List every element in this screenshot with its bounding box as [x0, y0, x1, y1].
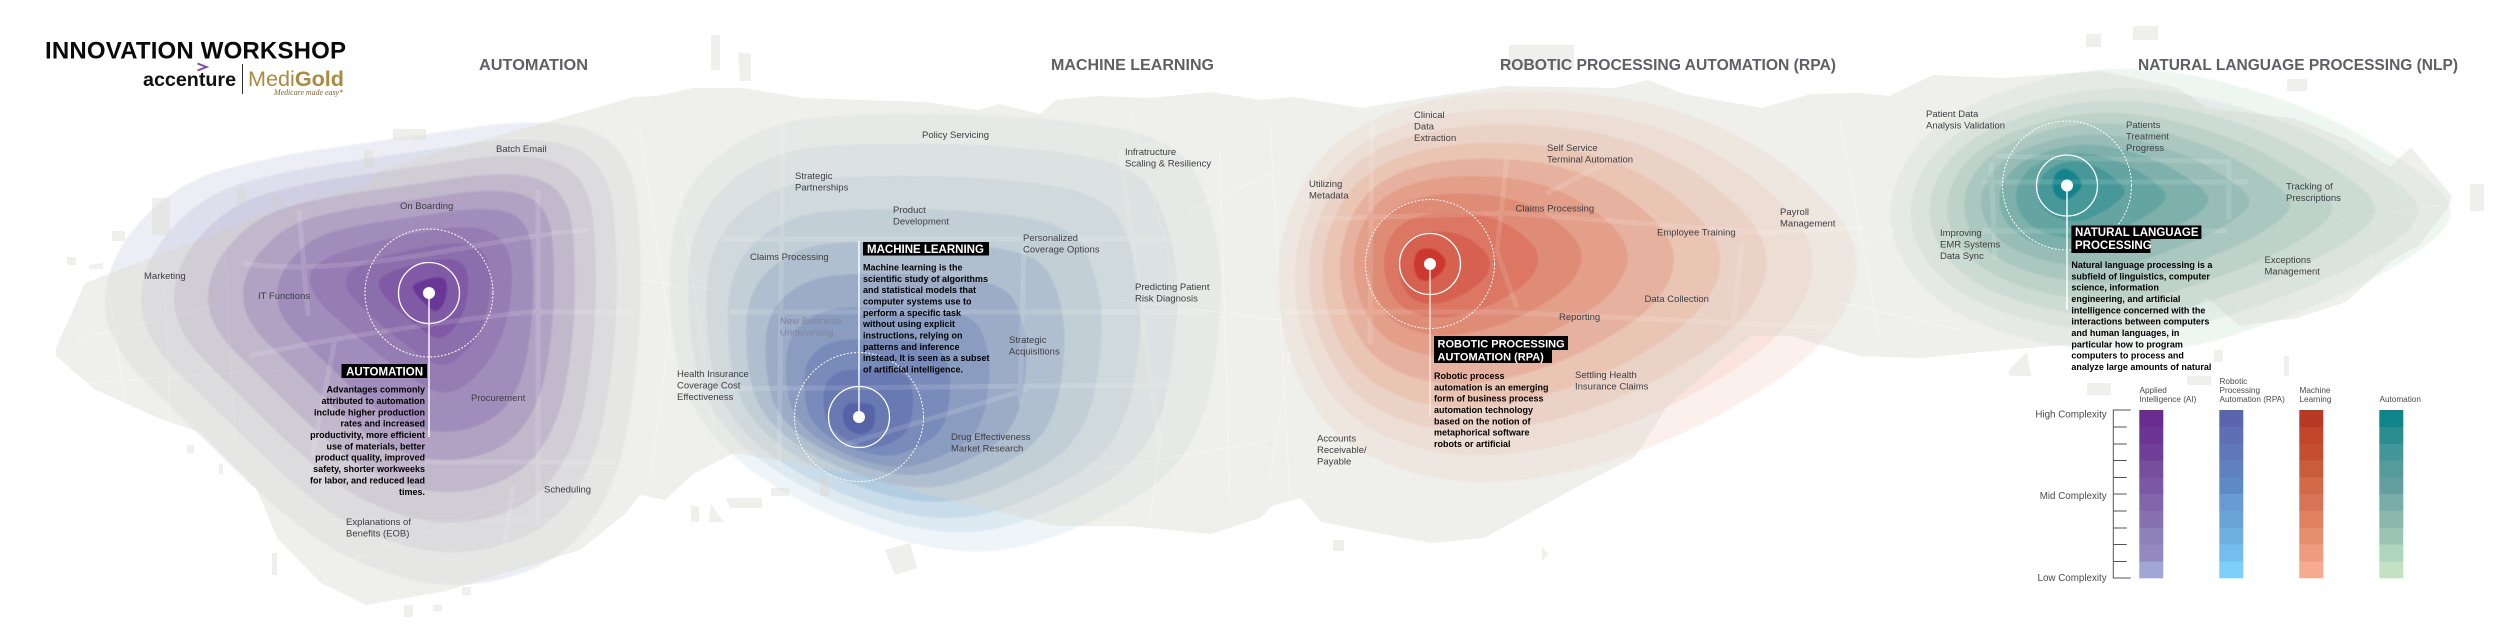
legend axis — [2113, 410, 2131, 578]
thin street lines on land — [60, 110, 2440, 560]
label: Payroll Management: Payroll — [1780, 207, 1809, 218]
callout text: robotic processing automation: robots or artificial — [1434, 439, 1511, 449]
center marker: natural language processing — [2002, 121, 2132, 310]
label: On Boarding: On Boarding — [400, 201, 453, 212]
label: Strategic Acquisitions: Acquisitions — [1009, 346, 1060, 357]
label: Payroll Management: Management — [1780, 218, 1836, 229]
contour rings: natural language processing — [1891, 69, 2451, 352]
label: Strategic Partnerships: Partnerships — [795, 182, 849, 193]
label: Patients Treatment Progress: Treatment — [2126, 131, 2169, 142]
legend: complexity scale — [2035, 377, 2421, 584]
panel: automation contour map — [105, 123, 641, 585]
label: Employee Training: Employee Training — [1657, 228, 1736, 238]
center marker: machine learning — [794, 241, 924, 482]
callout text: machine learning: and statistical models that — [863, 285, 976, 295]
panel: robotic processing automation contour map — [1278, 91, 1864, 482]
label: Improving EMR Systems Data Sync: Data Sync — [1940, 251, 1984, 262]
label: Tracking of Prescriptions: Tracking of — [2286, 182, 2333, 193]
callout text: robotic processing automation: metaphorical software — [1434, 428, 1530, 438]
column label: applied intelligence: Intelligence (AI) — [2140, 395, 2197, 404]
callout text: natural language processing: interactions between computers — [2071, 317, 2209, 327]
heading: machine learning: MACHINE LEARNING — [1051, 57, 1214, 74]
colour bar: purple — [2139, 410, 2163, 578]
column label: machine learning: Machine — [2300, 386, 2331, 395]
callout text: automation: productivity, more efficient — [310, 430, 425, 440]
label: Predicting Patient Risk Diagnosis: Risk Diagnosis — [1135, 293, 1198, 304]
callout text: automation: Advantages commonly — [326, 385, 425, 395]
logo: MediGold: Medicare made easy* — [273, 88, 343, 97]
label: Improving EMR Systems Data Sync: Improving — [1940, 228, 1982, 239]
column label: machine learning: Learning — [2300, 395, 2332, 404]
callout text: machine learning: Machine learning is the — [863, 262, 963, 272]
callout text: automation: for labor, and reduced lead — [310, 475, 425, 485]
label: Accounts Receivable Payable: Payable — [1317, 456, 1351, 467]
label: Claims Processing: Claims Processing — [1516, 204, 1594, 214]
label: Explanations of Benefits: Benefits (EOB) — [346, 528, 409, 539]
callout text: automation: use of materials, better — [326, 441, 425, 451]
label: Patient Data Analysis Validation: Analysis Validation — [1926, 120, 2005, 131]
label: Utilizing Metadata: Utilizing — [1309, 179, 1342, 190]
callout tag: natural language processing: PROCESSING — [2075, 240, 2152, 252]
label: Drug Effectiveness Market Research: Drug Effectiveness — [951, 432, 1031, 443]
callout text: robotic processing automation: form of business process — [1434, 394, 1544, 404]
callout text: machine learning: perform a specific task — [863, 308, 962, 318]
axis label: mid complexity: Mid Complexity — [2040, 491, 2107, 502]
logo: accenture: accenture — [143, 69, 236, 91]
callout tag: robotic processing automation: ROBOTIC PROCESSING — [1438, 338, 1565, 350]
label: Strategic Partnerships: Strategic — [795, 171, 833, 182]
title: INNOVATION WORKSHOP — [45, 38, 346, 64]
callout tag: automation: AUTOMATION — [346, 366, 423, 378]
callout text: natural language processing: particular how to program — [2071, 339, 2183, 349]
label: Patient Data Analysis Validation: Patient Data — [1926, 109, 1979, 120]
label: Personalized Coverage Options: Personalized — [1023, 233, 1078, 244]
label: Accounts Receivable Payable: Receivable/ — [1317, 445, 1367, 456]
logo divider — [242, 64, 244, 94]
label: Settling Health Insurance Claims: Insurance Claims — [1575, 381, 1649, 392]
label: Self Service Terminal Automation: Terminal Automation — [1547, 154, 1633, 165]
column label: applied intelligence: Applied — [2140, 386, 2167, 395]
label: Patients Treatment Progress: Patients — [2126, 120, 2161, 131]
label: Drug Effectiveness Market Research: Market Research — [951, 443, 1023, 454]
label: Data Collection: Data Collection — [1644, 294, 1709, 305]
callout text: automation: include higher production — [314, 407, 425, 417]
label: Self Service Terminal Automation: Self Service — [1547, 143, 1598, 154]
label: New Business Underwriting: Underwriting — [780, 327, 833, 338]
label: Procurement: Procurement — [471, 393, 526, 404]
logo: MediGold: MediGold — [248, 66, 344, 91]
callout text: natural language processing: science, information — [2071, 283, 2159, 293]
label: Product Development: Product — [893, 205, 926, 216]
label: Marketing: Marketing — [144, 271, 186, 282]
label: Improving EMR Systems Data Sync: EMR Systems — [1940, 239, 2000, 250]
callout text: natural language processing: intelligence concerned with the — [2071, 305, 2205, 315]
contour rings: robotic processing automation — [1278, 91, 1857, 482]
heading: automation: AUTOMATION — [479, 57, 588, 74]
column label: automation: Automation — [2380, 395, 2421, 404]
label: Tracking of Prescriptions: Prescriptions — [2286, 193, 2341, 204]
colour bar: teal — [2379, 410, 2403, 578]
center marker: automation — [365, 229, 493, 437]
off-land colour glow under the map — [105, 69, 2451, 585]
label: Settling Health Insurance Claims: Settling Health — [1575, 370, 1637, 381]
callout text: automation: attributed to automation — [322, 396, 425, 406]
label: Product Development: Development — [893, 216, 949, 227]
callout text: robotic processing automation: automation is an emerging — [1434, 382, 1549, 392]
contour rings: automation — [105, 123, 641, 585]
callout text: robotic processing automation: based on the notion of — [1434, 416, 1531, 426]
callout text: machine learning: of artificial intelligence. — [863, 365, 963, 375]
callout text: robotic processing automation: automation technology — [1434, 405, 1533, 415]
callout text: automation: rates and increased — [340, 419, 425, 429]
heading: natural language processing: NATURAL LANGUAGE PROCESSING (NLP) — [2138, 57, 2458, 74]
label: IT Functions: IT Functions — [258, 291, 310, 302]
axis label: high complexity: High Complexity — [2035, 410, 2107, 420]
label: Personalized Coverage Options: Coverage Options — [1023, 244, 1100, 255]
callout text: machine learning: without using explicit — [862, 319, 955, 329]
callout tag: machine learning: MACHINE LEARNING — [867, 244, 984, 256]
label: Explanations of Benefits: Explanations of — [346, 517, 411, 528]
colour bar: blue — [2219, 410, 2243, 578]
callout tag: robotic processing automation — [1434, 336, 1568, 363]
label: Reporting: Reporting — [1559, 312, 1600, 323]
label: Policy Servicing: Policy Servicing — [922, 130, 989, 141]
callout text: machine learning: patterns and inference — [863, 342, 960, 352]
panel: natural language processing contour map — [1891, 69, 2451, 372]
callout text: natural language processing: engineering, and artificial — [2071, 294, 2180, 304]
callout text: machine learning: instructions, relying on — [863, 331, 963, 341]
column label: robotic processing automation: Processing — [2220, 386, 2260, 395]
callout tag: natural language processing — [2071, 226, 2201, 253]
callout text: machine learning: computer systems use to — [863, 297, 972, 307]
label: Predicting Patient Risk Diagnosis: Predicting Patient — [1135, 282, 1210, 293]
label: Utilizing Metadata: Metadata — [1309, 190, 1349, 201]
callout text: automation: times. — [399, 487, 425, 497]
callout text: natural language processing: analyze large amounts of natural — [2071, 362, 2211, 372]
callout text: automation: product quality, improved — [315, 453, 425, 463]
label: Infratructure Scaling and Resiliency: Infratructure — [1125, 147, 1176, 158]
label: Health Insurance Coverage Cost Effectiveness: Coverage Cost — [677, 380, 741, 391]
label: Patients Treatment Progress: Progress — [2126, 143, 2164, 154]
column label: robotic processing automation: Robotic — [2220, 377, 2247, 386]
label: Clinical Data Extraction: Extraction — [1414, 133, 1456, 144]
callout text: natural language processing: Natural language processing is a — [2071, 260, 2213, 270]
label: Scheduling: Scheduling — [544, 484, 591, 496]
label: Exceptions Management: Exceptions — [2264, 255, 2311, 266]
label: Accounts Receivable Payable: Accounts — [1317, 434, 1356, 444]
colour bar: red — [2299, 410, 2323, 578]
label: Clinical Data Extraction: Clinical — [1414, 110, 1445, 121]
callout text: machine learning: scientific study of algorithms — [863, 274, 988, 284]
callout tag: natural language processing: NATURAL LANGUAGE — [2075, 227, 2199, 239]
callout text: automation: safety, shorter workweeks — [313, 464, 425, 474]
label: Strategic Acquisitions: Strategic — [1009, 335, 1047, 346]
callout text: natural language processing: and human languages, in — [2071, 328, 2179, 338]
callout tag: robotic processing automation: AUTOMATION (RPA) — [1438, 351, 1544, 363]
label: Infratructure Scaling and Resiliency: Scaling & Resiliency — [1125, 158, 1211, 169]
callout text: natural language processing: subfield of linguistics, computer — [2071, 271, 2210, 281]
label: Claims Processing: Claims Processing — [750, 252, 829, 263]
label: Clinical Data Extraction: Data — [1414, 121, 1435, 132]
center marker: robotic processing automation — [1366, 200, 1494, 417]
panel: machine learning contour map — [670, 114, 1221, 552]
label: Health Insurance Coverage Cost Effectiveness: Health Insurance — [677, 369, 749, 380]
contour rings: machine learning — [670, 114, 1221, 552]
axis label: low complexity: Low Complexity — [2038, 573, 2107, 584]
label: Exceptions Management: Management — [2264, 266, 2320, 277]
callout text: machine learning: instead. It is seen as a subset — [863, 353, 990, 363]
label: Health Insurance Coverage Cost Effectiveness: Effectiveness — [677, 392, 734, 403]
column label: robotic processing automation: Automation (RPA) — [2220, 395, 2285, 404]
label: Batch Email: Batch Email — [496, 144, 547, 155]
callout text: natural language processing: computers to process and — [2071, 351, 2184, 361]
heading: robotic processing automation: ROBOTIC PROCESSING AUTOMATION (RPA) — [1500, 57, 1836, 74]
label: New Business Underwriting: New Business/ — [780, 316, 843, 327]
callout text: robotic processing automation: Robotic process — [1434, 371, 1505, 381]
